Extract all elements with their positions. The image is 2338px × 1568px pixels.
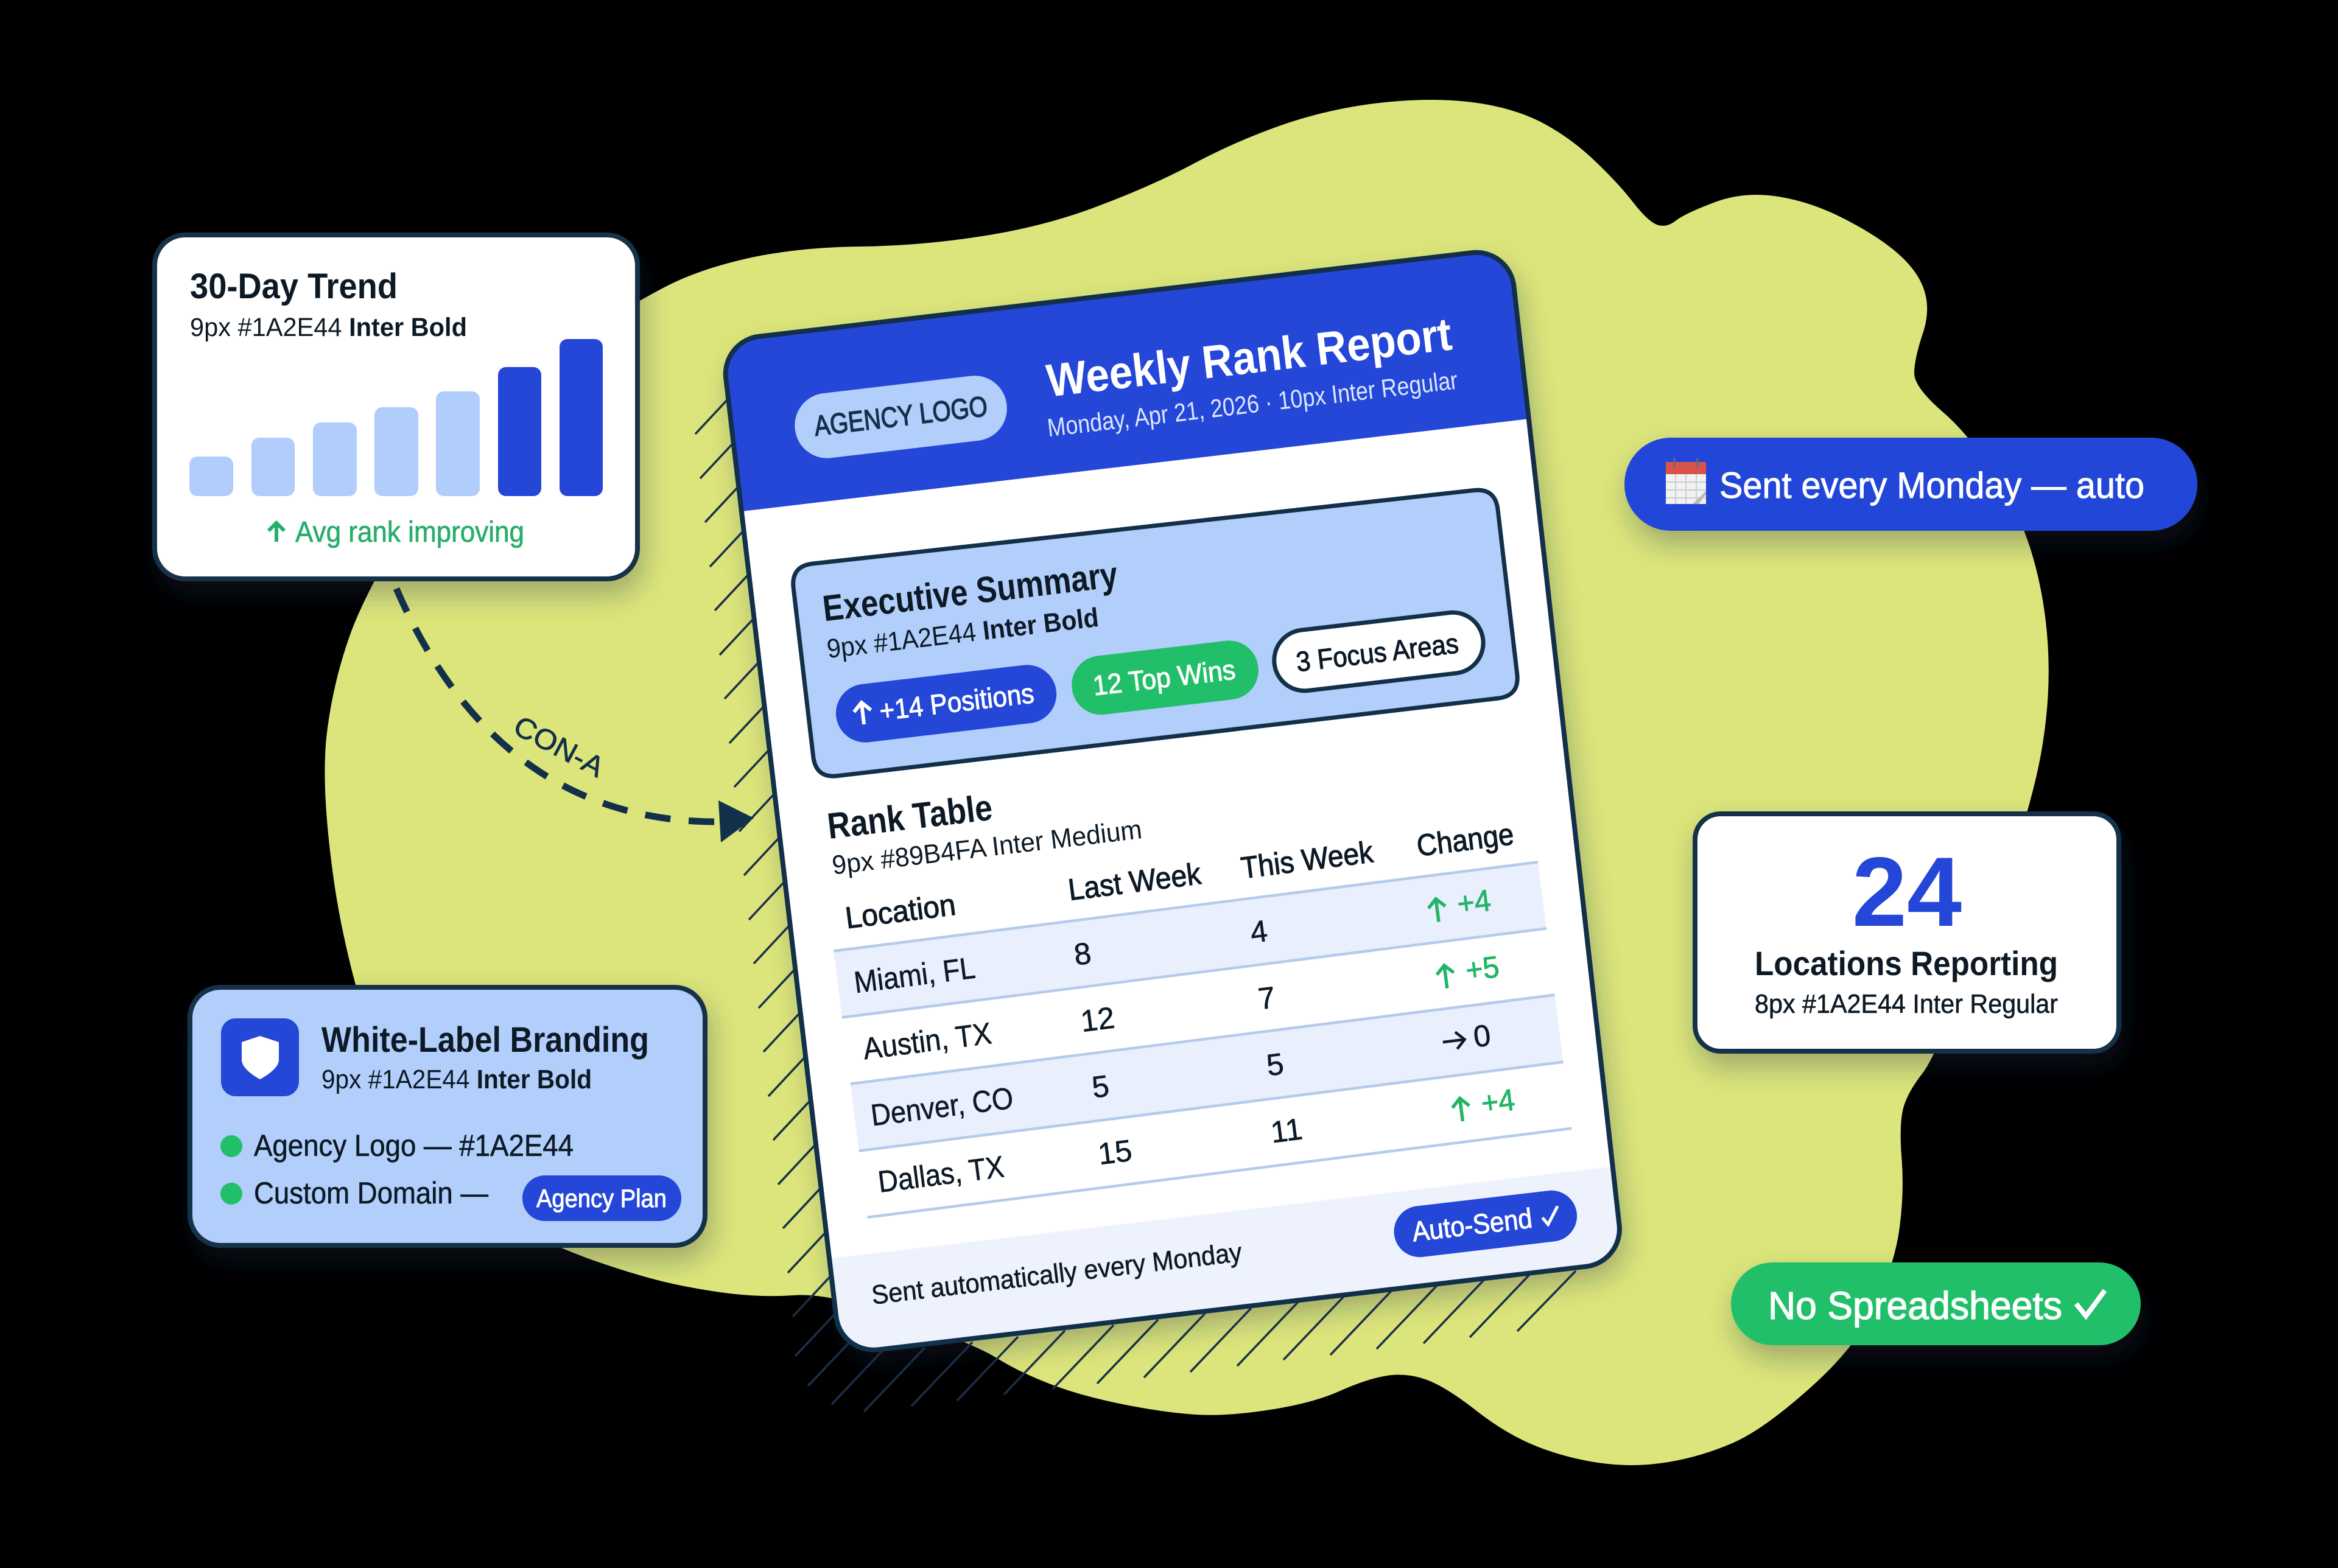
panel: 30-day trend (155, 235, 637, 579)
trend heading: 30-Day Trend (190, 267, 398, 306)
big number 24: 24 (1852, 837, 1962, 947)
row: Denver (869, 1018, 1493, 1133)
pill: top wins (1069, 637, 1262, 718)
main report card (721, 248, 1629, 1356)
list item: custom domain: Custom Domain — (254, 1176, 488, 1210)
rank table (827, 814, 1571, 1217)
row: Denver: 0 (1472, 1018, 1493, 1054)
row: Miami: 8 (1072, 936, 1093, 972)
agency logo pill (792, 372, 1011, 462)
rank table heading: Rank Table (825, 787, 994, 847)
pill: sent every Monday: Sent every Monday — auto (1719, 465, 2144, 506)
pill: focus areas (1271, 609, 1487, 694)
row: Miami: +4 (1455, 883, 1493, 921)
rank table subtitle: 9px #89B4FA Inter Medium (830, 814, 1143, 881)
row: Dallas: 15 (1096, 1133, 1134, 1171)
dashed connector arrow CON-A (396, 589, 754, 842)
row: Dallas (876, 1082, 1517, 1199)
table header row: Location (843, 887, 958, 935)
locations subtitle: 8px #1A2E44 Inter Regular (1755, 989, 2058, 1019)
pill: positions (833, 662, 1059, 746)
pill: top wins: 12 Top Wins (1091, 653, 1237, 701)
pill: no spreadsheets (1731, 1262, 2141, 1345)
agency plan pill: Agency Plan (536, 1184, 667, 1213)
row: Austin: +5 (1464, 950, 1501, 987)
lime background blob (325, 100, 2049, 1465)
row: Dallas: Dallas, TX (876, 1149, 1006, 1199)
agency plan pill (522, 1175, 681, 1221)
row: Miami (852, 883, 1493, 999)
auto-send pill (1391, 1188, 1580, 1260)
panel: white-label branding (190, 987, 705, 1245)
locations heading: Locations Reporting (1755, 944, 2058, 982)
pill: sent every Monday (1624, 438, 2197, 531)
trend caption: Avg rank improving (295, 516, 524, 548)
executive summary subtitle: 9px #1A2E44 Inter Bold (825, 603, 1100, 664)
list item: agency logo: Agency Logo — #1A2E44 (254, 1129, 574, 1163)
panel: locations reporting (1695, 814, 2119, 1051)
row: Miami: 4 (1248, 914, 1269, 950)
branding subtitle: 9px #1A2E44 Inter Bold (321, 1065, 592, 1094)
table header row: Last Week (1066, 856, 1203, 907)
table header row: Change (1415, 817, 1515, 863)
row: Austin: 12 (1079, 1001, 1117, 1038)
icon: shield (221, 1018, 299, 1096)
executive summary heading: Executive Summary (821, 554, 1120, 629)
row: Austin: Austin, TX (861, 1016, 994, 1066)
pill: no spreadsheets: No Spreadsheets (1768, 1284, 2062, 1328)
row: Miami: Miami, FL (852, 951, 977, 999)
panel: executive summary (791, 483, 1520, 779)
footer note: Sent automatically every Monday (870, 1237, 1243, 1311)
auto-send pill: Auto-Send (1410, 1202, 1534, 1247)
dashed connector arrow CON-A: CON-A (508, 709, 610, 783)
report title: Weekly Rank Report (1044, 308, 1455, 407)
row: Denver: 5 (1090, 1069, 1111, 1105)
hatch pattern behind report card (695, 388, 1576, 1412)
row: Denver: Denver, CO (869, 1081, 1015, 1133)
row: Dallas: 11 (1269, 1111, 1304, 1149)
row: Austin (861, 950, 1501, 1066)
report date subtitle: Monday, Apr 21, 2026 · 10px Inter Regular (1046, 366, 1459, 442)
bar chart (189, 339, 603, 496)
row: Dallas: +4 (1479, 1082, 1517, 1121)
icon: calendar (1666, 458, 1706, 504)
report header band (721, 248, 1629, 1356)
branding heading: White-Label Branding (321, 1020, 649, 1060)
agency logo pill: AGENCY LOGO (812, 390, 989, 442)
row: Denver: 5 (1265, 1046, 1286, 1082)
trend subtitle: 9px #1A2E44 Inter Bold (190, 313, 467, 342)
pill: positions: +14 Positions (878, 677, 1036, 727)
table header row: This Week (1239, 835, 1375, 885)
table header row (843, 817, 1515, 935)
pill: focus areas: 3 Focus Areas (1294, 627, 1460, 677)
row: Austin: 7 (1256, 980, 1277, 1016)
